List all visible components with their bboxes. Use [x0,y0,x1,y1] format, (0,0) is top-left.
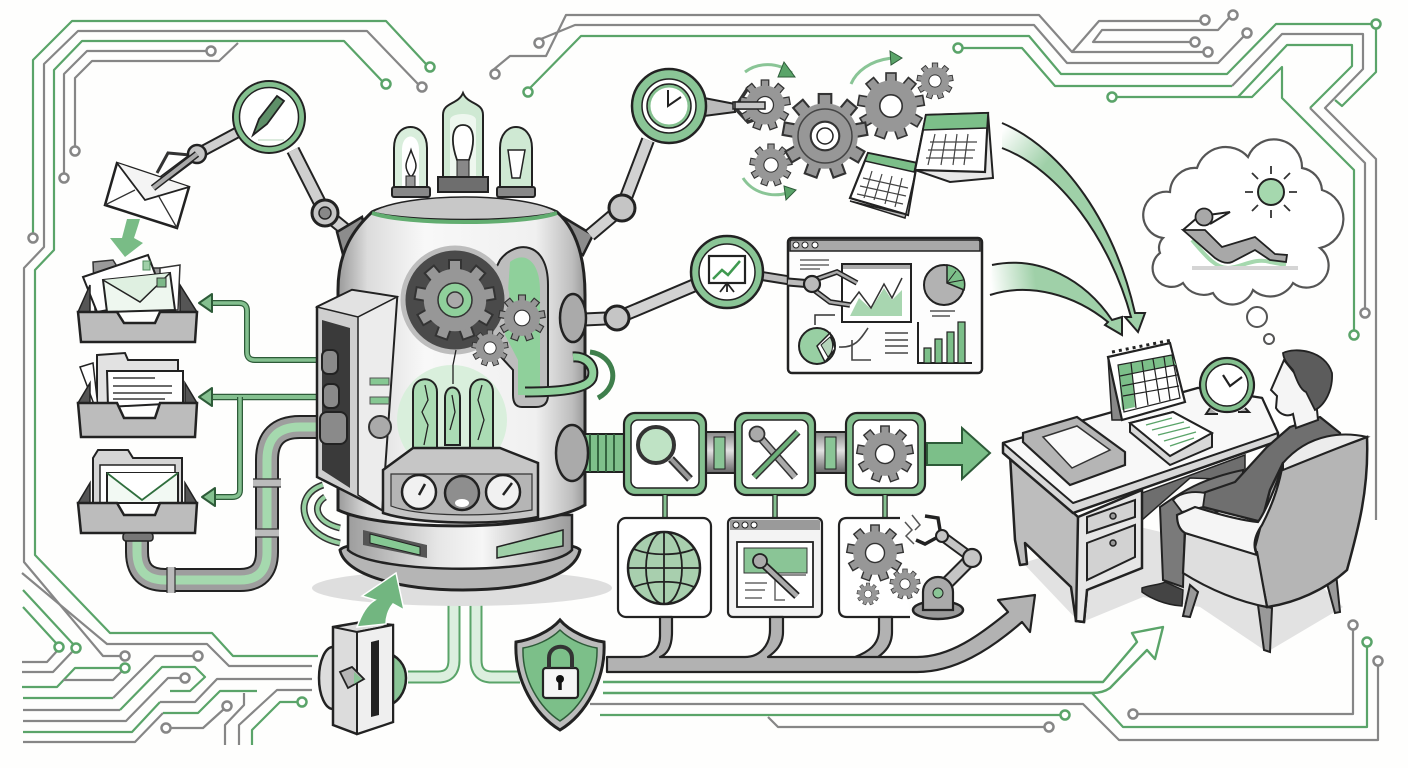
desk side panel and legs [1010,455,1087,622]
machine floor connections [408,590,520,677]
icon: tools tile [735,413,815,495]
pie chart top right [924,265,965,316]
tile: globe [618,518,711,617]
green interior [505,257,540,395]
person in armchair [1142,350,1367,652]
icon: key slot box [319,622,406,734]
gears cluster [735,51,953,200]
icon: empty tray [1023,417,1125,485]
floor shadow below machine [312,570,612,606]
floor shadow [1023,527,1343,652]
arrow: envelope to tray [110,219,143,257]
armchair [1177,435,1367,652]
icon: desk clock [1200,358,1254,414]
robot arm with chart badge [560,236,812,342]
person legs [1142,470,1243,606]
icon: clock badge [632,69,706,143]
bar chart [918,322,972,363]
green coil pipe [525,352,613,398]
person hand [1173,492,1205,512]
tile: web settings [728,518,822,617]
green flow arrow: calendar to desk [1002,123,1145,332]
thought cloud [1143,139,1343,304]
desk [1003,340,1343,652]
machine [312,93,613,606]
pipe: loop lower left of machine [304,485,340,543]
pipeline [556,413,990,518]
machine dome body [338,199,585,526]
person torso [1203,417,1348,522]
circuit traces: top right [490,10,1380,520]
glass tubes [413,350,493,448]
relaxing figure [1183,208,1298,300]
icon: envelope [105,154,197,228]
icon: shield with padlock [516,620,604,730]
robot claw on dashboard [788,272,857,305]
glow behind tubes [397,365,507,475]
robot arm mount right [560,217,593,255]
bulb right [497,127,535,197]
icon: pen badge [232,80,306,154]
circuit traces: top left [24,21,434,656]
desk drawers [1076,490,1142,622]
tray: middle documents [78,353,197,437]
gear housing [403,248,507,352]
green flow arrow: dashboard to desk [990,263,1122,335]
robot arm with clock badge [590,69,767,235]
gray arrow: security to desk [607,595,1035,672]
icon: desk calendar [1108,340,1185,420]
circuit traces: bottom right [590,620,1382,740]
green rim on dome [372,213,557,222]
dome cap highlight [372,197,557,220]
gears in window [415,260,545,366]
icon: sun [1245,166,1297,218]
icon: gear tile [846,413,925,495]
person head [1271,350,1332,428]
dashboard panel [788,238,982,373]
pipeline tube [572,434,624,472]
thought bubbles [1247,307,1274,344]
icon: robot arm [913,516,981,619]
icon: chart badge [691,236,763,308]
arrow: up into machine [357,573,404,627]
knee space [1142,455,1245,520]
icon: calendar small [850,153,917,218]
bulb left [392,127,430,197]
arrow: pipeline output [927,428,990,479]
icon: calendar large [915,113,993,182]
machine base [340,515,580,590]
gauge console [383,448,538,523]
arrows: machine to trays [199,294,323,506]
pie chart bottom left [799,315,835,364]
tray: top mail [78,255,197,342]
bulb centre [438,93,488,192]
icon: paper stack [1130,412,1212,465]
tray: bottom envelope [78,450,197,533]
robot arm mount left [337,217,367,262]
circuit traces: bottom left [22,573,312,745]
tile: gears and robot [839,515,920,617]
side control panel [317,290,397,510]
robot arm with pen badge [153,80,352,235]
pipe: machine to bottom tray [123,427,325,593]
window frame right [490,247,548,407]
desk top [1003,388,1278,513]
icon: magnifier tile [624,413,706,495]
line chart [842,264,911,322]
